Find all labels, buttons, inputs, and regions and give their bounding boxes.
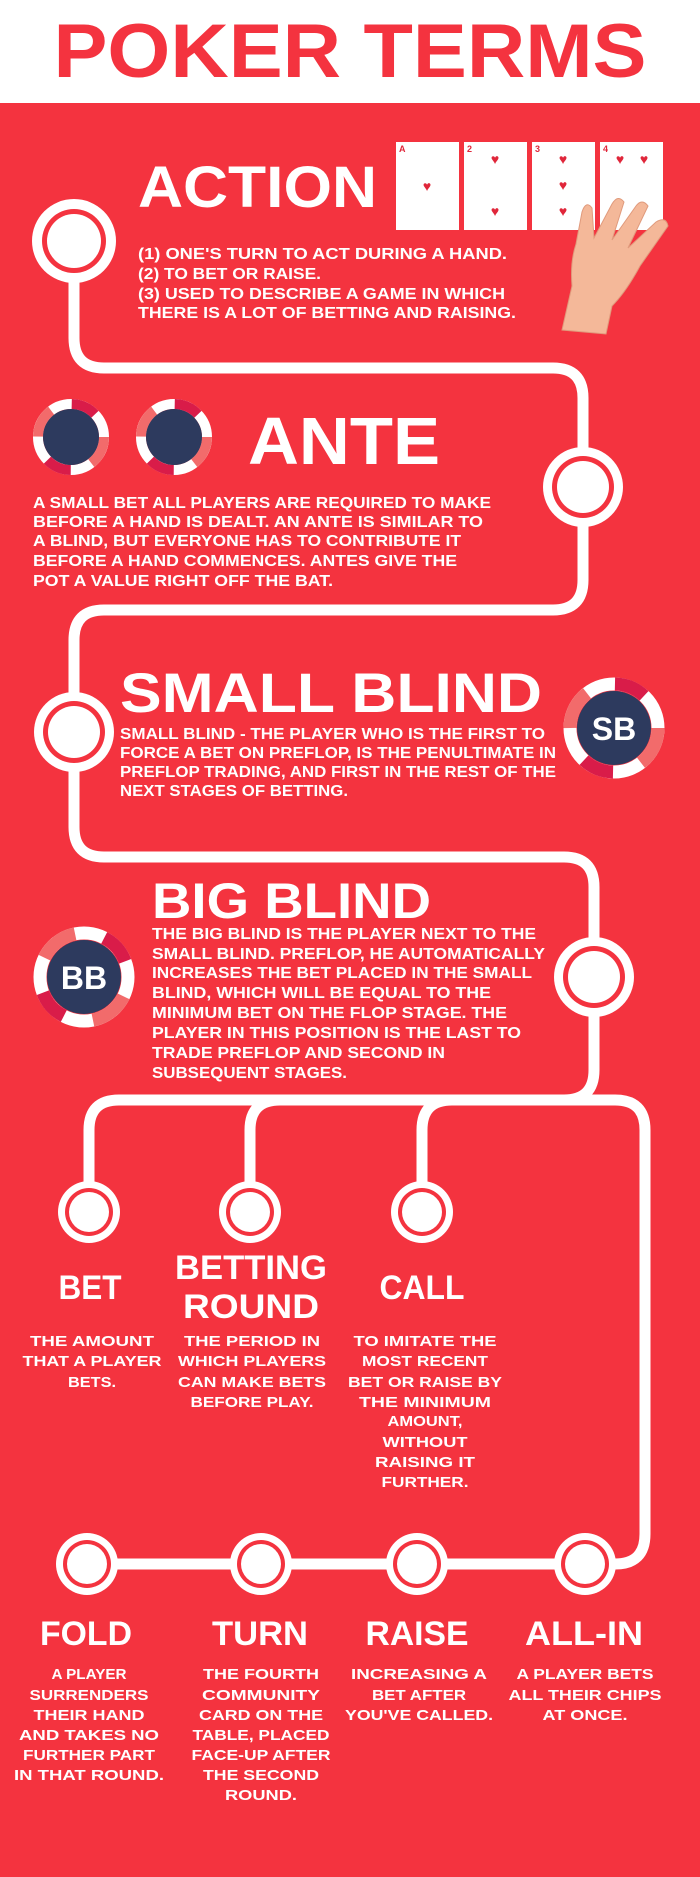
- term: call: BET OR RAISE BY: [348, 1374, 502, 1391]
- small nodes row 1: [58, 1181, 453, 1243]
- term: raise: INCREASING A: [351, 1666, 487, 1683]
- text: small blind definition: FORCE A BET ON PREFLOP, IS THE PENULTIMATE IN: [120, 745, 556, 762]
- icon: playing cards: ♥: [423, 178, 431, 194]
- text: small blind definition: SMALL BLIND - THE PLAYER WHO IS THE FIRST TO: [120, 726, 545, 743]
- term: raise: BET AFTER: [372, 1687, 466, 1704]
- icon: playing cards: ♥: [559, 177, 567, 193]
- term: turn: THE SECOND: [203, 1767, 319, 1784]
- term: betting round: ROUND: [183, 1288, 319, 1326]
- small nodes row 2: [56, 1533, 616, 1595]
- header band: [0, 0, 700, 103]
- term: turn: FACE-UP AFTER: [192, 1747, 331, 1764]
- term: betting round: [175, 1249, 327, 1411]
- text: ante definition: BEFORE A HAND IS DEALT. AN ANTE IS SIMILAR TO: [33, 514, 483, 531]
- term: fold: [14, 1615, 164, 1784]
- icon: SB chip: [570, 684, 658, 772]
- text: big blind definition: TRADE PREFLOP AND SECOND IN: [152, 1045, 445, 1062]
- heading: action: ACTION: [138, 155, 377, 220]
- icon: playing cards: ♥: [616, 151, 624, 167]
- text: action definition: [138, 246, 516, 322]
- term: call: WITHOUT: [382, 1434, 468, 1451]
- icon: chip 1: [38, 404, 104, 470]
- text: small blind definition: [120, 726, 556, 800]
- icon: playing cards: ♥: [559, 151, 567, 167]
- node: action: [32, 199, 116, 283]
- term: turn: TURN: [212, 1615, 308, 1653]
- term: call: FURTHER.: [382, 1474, 468, 1491]
- term: call: THE MINIMUM: [359, 1394, 491, 1411]
- text: small blind definition: NEXT STAGES OF BETTING.: [120, 783, 348, 800]
- icon: chip 2: [141, 404, 207, 470]
- node: ante: [543, 447, 623, 527]
- text: ante definition: POT A VALUE RIGHT OFF THE BAT.: [33, 573, 333, 590]
- term: turn: CARD ON THE: [199, 1707, 323, 1724]
- icon: playing cards: A: [399, 144, 406, 154]
- text: action definition: (2) TO BET OR RAISE.: [138, 266, 321, 283]
- icon: playing cards: ♥: [640, 151, 648, 167]
- text: big blind definition: THE BIG BLIND IS THE PLAYER NEXT TO THE: [152, 926, 536, 943]
- term: betting round: THE PERIOD IN: [184, 1333, 320, 1350]
- term: bet: BETS.: [68, 1374, 116, 1391]
- icon: playing cards: 4: [603, 144, 608, 154]
- term: call: MOST RECENT: [362, 1353, 488, 1370]
- term: raise: [345, 1615, 493, 1724]
- term: bet: BET: [58, 1269, 122, 1307]
- text: action definition: (1) ONE'S TURN TO ACT DURING A HAND.: [138, 246, 507, 263]
- term: turn: TABLE, PLACED: [192, 1727, 330, 1744]
- term: fold: FURTHER PART: [23, 1747, 155, 1764]
- text: action definition: (3) USED TO DESCRIBE A GAME IN WHICH: [138, 286, 505, 303]
- heading: small blind: SMALL BLIND: [120, 661, 542, 724]
- text: big blind definition: BLIND, WHICH WILL BE EQUAL TO THE: [152, 985, 491, 1002]
- icon: playing cards: ♥: [559, 203, 567, 219]
- icon: playing cards: 3: [535, 144, 540, 154]
- term: betting round: BETTING: [175, 1249, 327, 1287]
- term: bet: [22, 1269, 162, 1391]
- icon: BB chip: [40, 933, 128, 1021]
- text: action definition: THERE IS A LOT OF BETTING AND RAISING.: [138, 305, 516, 322]
- term: call: RAISING IT: [375, 1454, 475, 1471]
- icon: playing cards: [396, 142, 663, 230]
- term: call: CALL: [380, 1269, 464, 1307]
- text: small blind definition: PREFLOP TRADING, AND FIRST IN THE REST OF THE: [120, 764, 556, 781]
- term: fold: SURRENDERS: [30, 1687, 148, 1704]
- text: big blind definition: [152, 926, 545, 1082]
- term: fold: THEIR HAND: [34, 1707, 145, 1724]
- term: call: TO IMITATE THE: [354, 1333, 496, 1350]
- icon: BB chip: BB: [61, 960, 107, 996]
- text: ante definition: BEFORE A HAND COMMENCES. ANTES GIVE THE: [33, 553, 457, 570]
- icon: SB chip: SB: [592, 711, 636, 747]
- icon: playing cards: 2: [467, 144, 472, 154]
- term: betting round: CAN MAKE BETS: [178, 1374, 326, 1391]
- text: big blind definition: SMALL BLIND. PREFLOP, HE AUTOMATICALLY: [152, 946, 545, 963]
- term: fold: AND TAKES NO: [19, 1727, 159, 1744]
- term: raise: YOU'VE CALLED.: [345, 1707, 493, 1724]
- icon: hand: [562, 198, 668, 334]
- term: bet: THAT A PLAYER: [22, 1353, 162, 1370]
- term: betting round: WHICH PLAYERS: [178, 1353, 326, 1370]
- term: raise: RAISE: [366, 1615, 468, 1653]
- term: call: [348, 1269, 502, 1491]
- term: fold: A PLAYER: [52, 1666, 127, 1683]
- text: big blind definition: MINIMUM BET ON THE FLOP STAGE. THE: [152, 1005, 507, 1022]
- term: all-in: ALL THEIR CHIPS: [508, 1687, 662, 1704]
- icon: playing cards: ♥: [491, 203, 499, 219]
- term: bet: THE AMOUNT: [30, 1333, 154, 1350]
- term: fold: IN THAT ROUND.: [14, 1767, 164, 1784]
- term: turn: COMMUNITY: [202, 1687, 320, 1704]
- term: all-in: [508, 1615, 662, 1724]
- timeline path: [74, 241, 645, 1564]
- text: big blind definition: PLAYER IN THIS POSITION IS THE LAST TO: [152, 1025, 521, 1042]
- term: call: AMOUNT,: [388, 1413, 462, 1430]
- title: POKER TERMS: [54, 9, 646, 94]
- term: all-in: A PLAYER BETS: [516, 1666, 654, 1683]
- text: big blind definition: SUBSEQUENT STAGES.: [152, 1065, 347, 1082]
- text: ante definition: A BLIND, BUT EVERYONE HAS TO CONTRIBUTE IT: [33, 533, 461, 550]
- text: ante definition: A SMALL BET ALL PLAYERS ARE REQUIRED TO MAKE: [33, 495, 491, 512]
- term: all-in: ALL-IN: [525, 1615, 643, 1653]
- term: turn: ROUND.: [225, 1787, 297, 1804]
- heading: ante: ANTE: [248, 404, 440, 479]
- term: turn: THE FOURTH: [203, 1666, 319, 1683]
- term: betting round: BEFORE PLAY.: [190, 1394, 314, 1411]
- term: turn: [192, 1615, 331, 1804]
- heading: big blind: BIG BLIND: [152, 873, 431, 929]
- text: ante definition: [33, 495, 491, 590]
- node: small blind: [34, 692, 114, 772]
- icon: playing cards: ♥: [491, 151, 499, 167]
- term: all-in: AT ONCE.: [542, 1707, 628, 1724]
- node: big blind: [554, 937, 634, 1017]
- text: big blind definition: INCREASES THE BET PLACED IN THE SMALL: [152, 965, 532, 982]
- term: fold: FOLD: [40, 1615, 132, 1653]
